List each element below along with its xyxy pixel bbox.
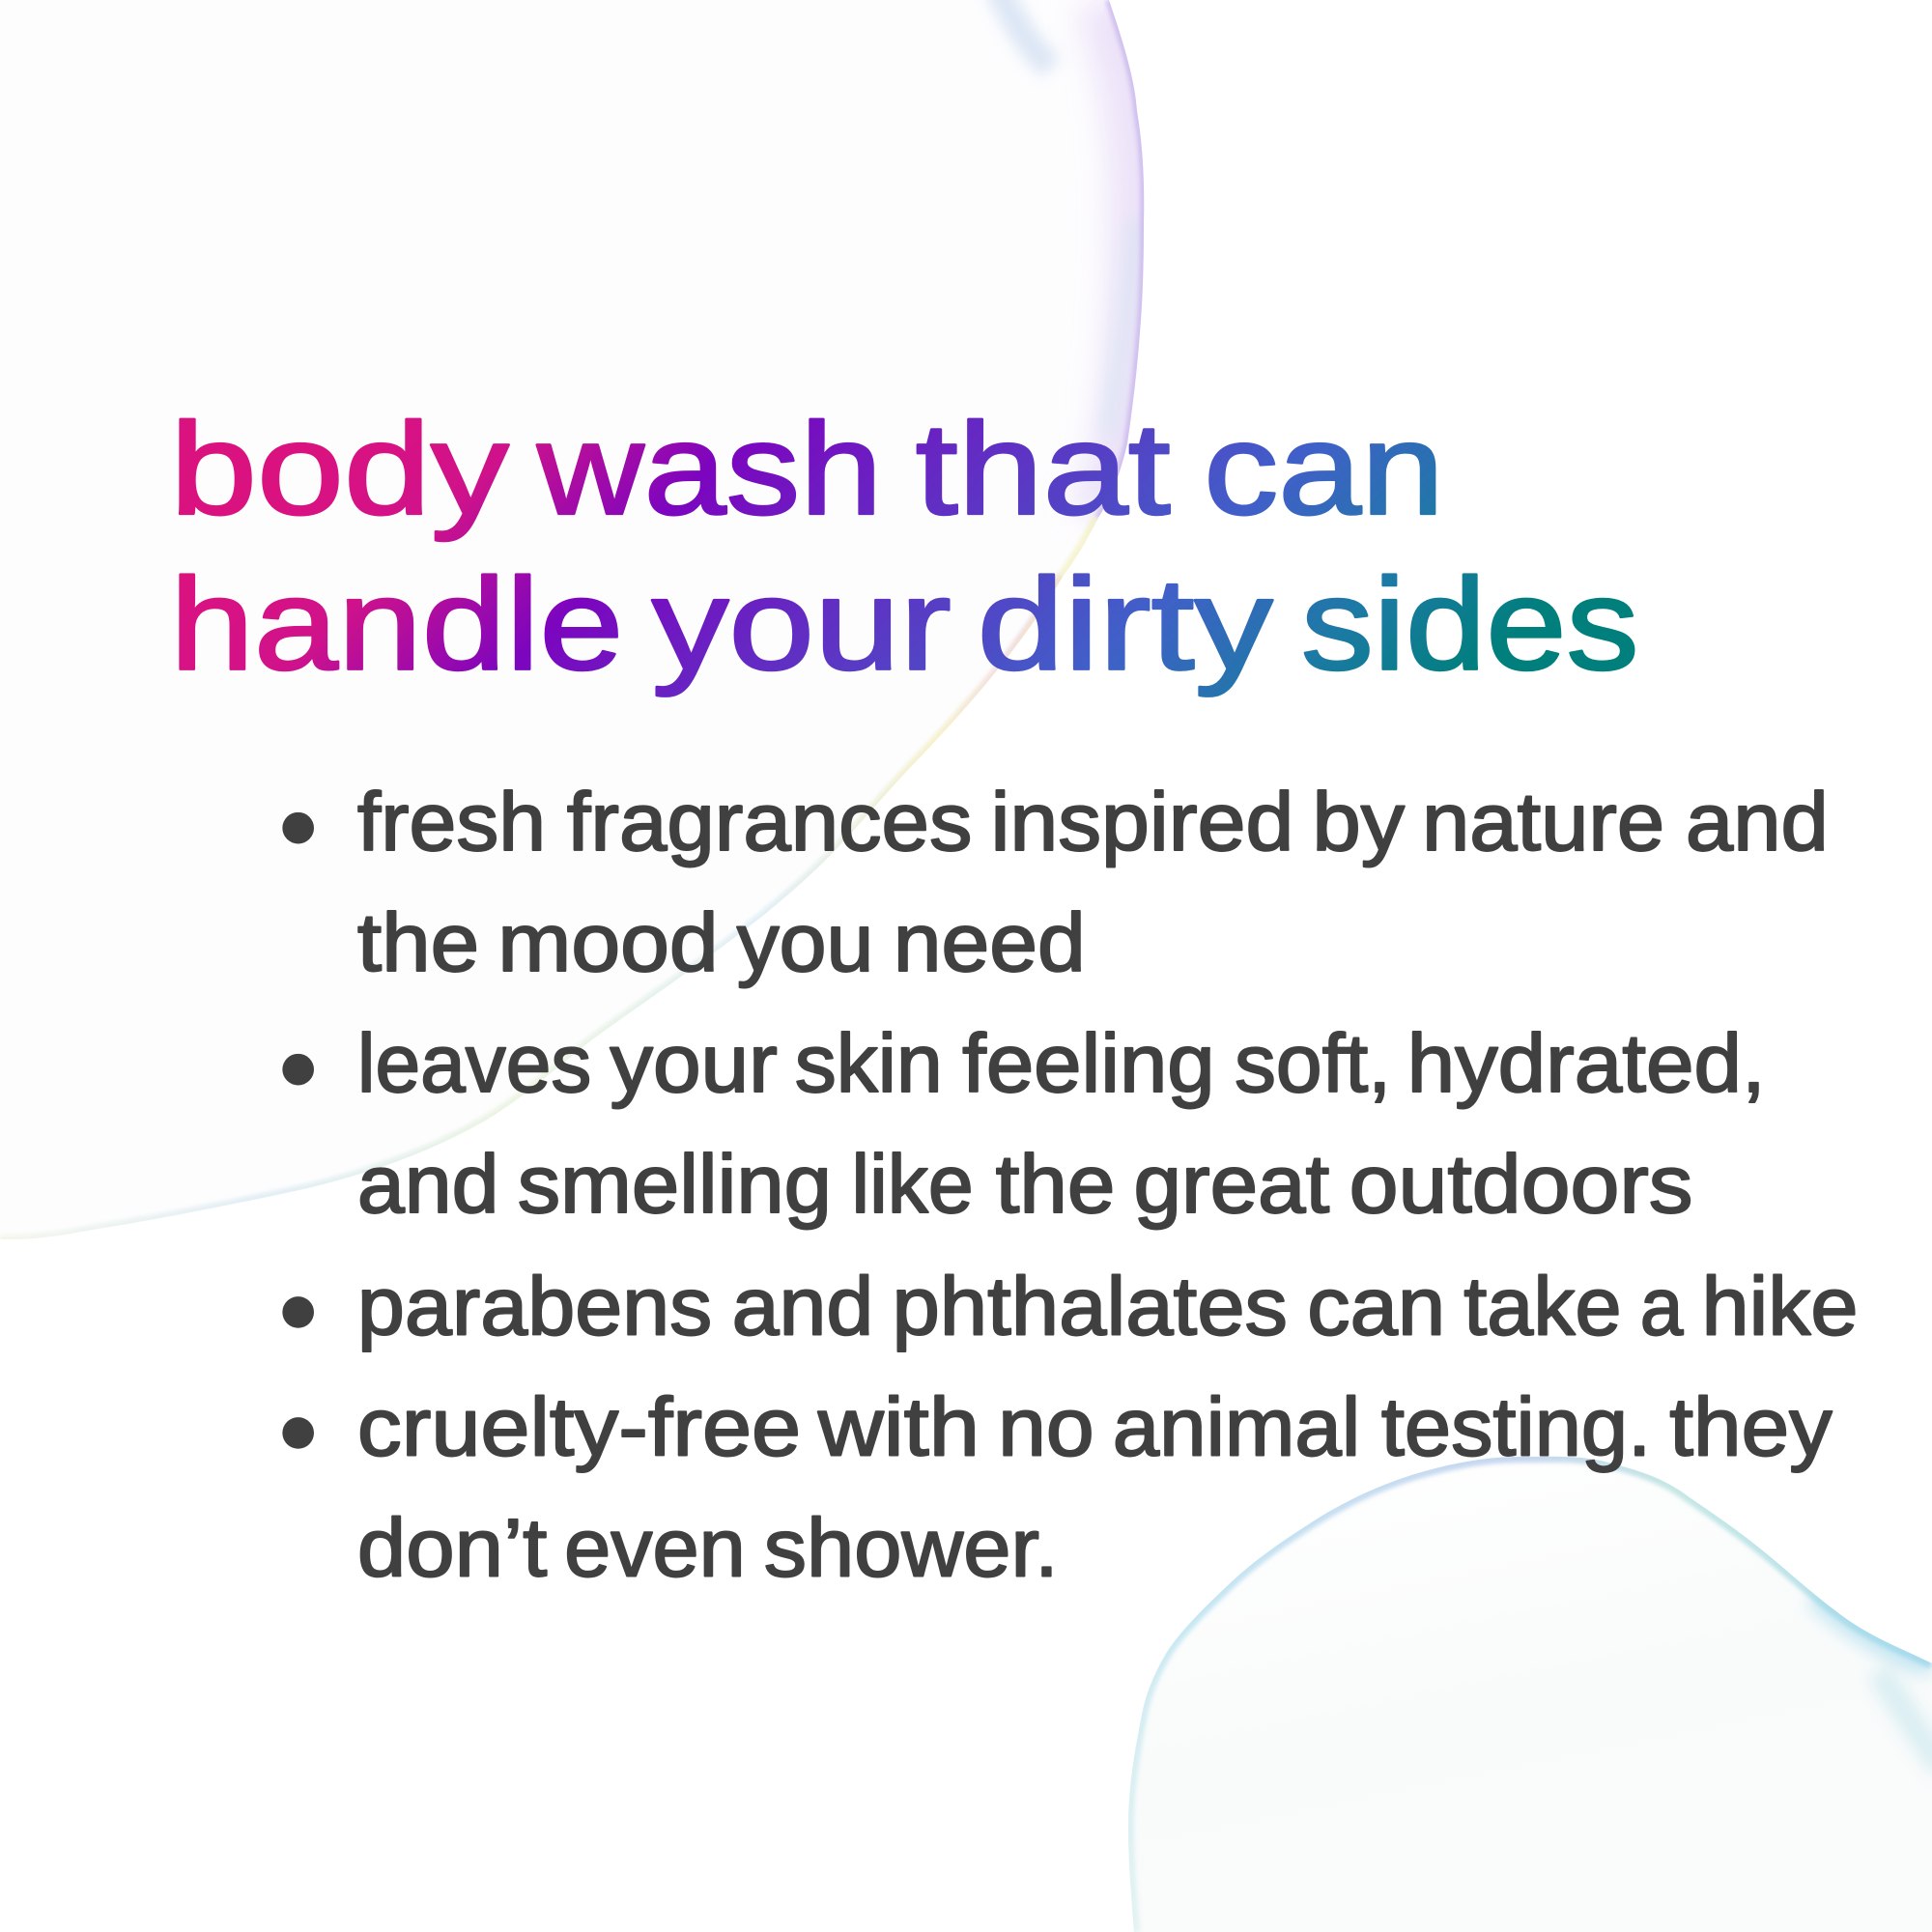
title: body: [170, 396, 509, 542]
bullet item: parabens and phthalates: parabens: [357, 1261, 712, 1352]
bullet item: fresh fragrances: fragrances: [567, 777, 972, 868]
bullet list: [282, 777, 1858, 1594]
bullet item: fresh fragrances: by: [1312, 777, 1405, 868]
bullet item: cruelty-free: even: [564, 1502, 746, 1594]
bullet item: leaves your skin: the: [996, 1139, 1115, 1231]
bullet item: fresh fragrances: nature: [1422, 777, 1664, 868]
bullet item: fresh fragrances: and: [1686, 777, 1829, 868]
bullet item: parabens and phthalates: hike: [1701, 1261, 1858, 1352]
bullet item: fresh fragrances: the: [357, 897, 479, 989]
title: dirty: [977, 552, 1273, 697]
bullet item: leaves your skin: soft,: [1235, 1018, 1391, 1110]
decorative soap bubble: top left: [0, 0, 1144, 1239]
bullet item: parabens and phthalates: [282, 1261, 1858, 1352]
title: that: [916, 396, 1171, 542]
bullet item: parabens and phthalates: a: [1640, 1261, 1684, 1352]
bullet item: leaves your skin: smelling: [518, 1139, 832, 1231]
title: your: [652, 552, 952, 697]
bullet item: parabens and phthalates: take: [1463, 1261, 1622, 1352]
bullet item: cruelty-free: with: [817, 1381, 980, 1473]
bullet item: cruelty-free: testing.: [1381, 1381, 1651, 1473]
bullet item: cruelty-free: shower.: [764, 1502, 1059, 1594]
bullet item: fresh fragrances: [282, 777, 1829, 989]
decorative soap bubble: bottom right: [1128, 1457, 1932, 1932]
bullet item: fresh fragrances: you: [737, 897, 873, 989]
bullet item: parabens and phthalates: phthalates: [892, 1261, 1288, 1352]
bullet item: fresh fragrances: need: [894, 897, 1086, 989]
bullet item: cruelty-free: [282, 1381, 1833, 1594]
bullet item: parabens and phthalates: and: [732, 1261, 873, 1352]
bullet item: leaves your skin: your: [610, 1018, 778, 1110]
bullet item: leaves your skin: and: [357, 1139, 499, 1231]
bullet item: fresh fragrances: fresh: [357, 777, 546, 868]
title: sides: [1301, 552, 1638, 697]
bullet item: cruelty-free: cruelty-free: [357, 1381, 801, 1473]
bullet item: parabens and phthalates: can: [1307, 1261, 1445, 1352]
bullet item: cruelty-free: they: [1669, 1381, 1833, 1473]
bullet item: leaves your skin: great: [1133, 1139, 1330, 1231]
bullet item: fresh fragrances: inspired: [991, 777, 1293, 868]
title: wash: [536, 396, 882, 542]
bullet item: leaves your skin: [282, 1018, 1766, 1231]
title: can: [1204, 396, 1444, 542]
bullet item: leaves your skin: feeling: [962, 1018, 1215, 1110]
bullet item: leaves your skin: leaves: [357, 1018, 591, 1110]
title: handle: [170, 552, 623, 697]
bullet item: cruelty-free: don’t: [357, 1502, 548, 1594]
bullet item: leaves your skin: skin: [795, 1018, 943, 1110]
bullet item: cruelty-free: no: [998, 1381, 1094, 1473]
bullet item: leaves your skin: outdoors: [1350, 1139, 1693, 1231]
bullet item: fresh fragrances: mood: [497, 897, 719, 989]
bullet item: leaves your skin: hydrated,: [1407, 1018, 1766, 1110]
bullet item: leaves your skin: like: [851, 1139, 974, 1231]
bullet item: cruelty-free: animal: [1113, 1381, 1360, 1473]
title: [170, 396, 1638, 697]
